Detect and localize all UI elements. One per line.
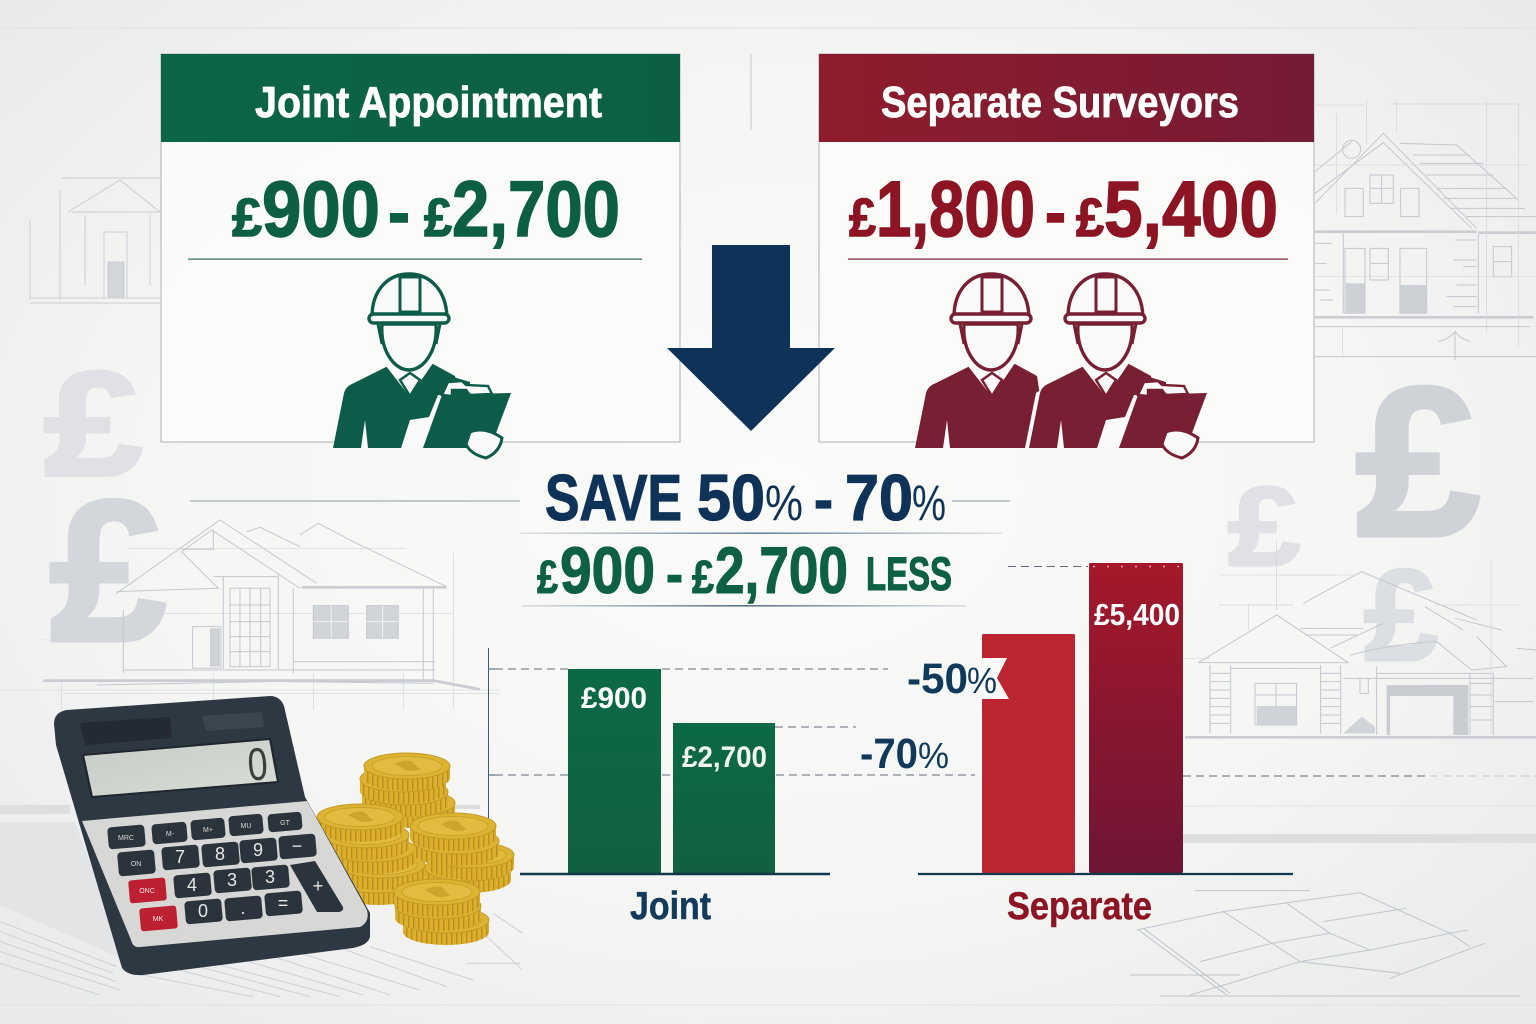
key labels: 0 [198, 901, 208, 921]
calculator lower face [82, 801, 368, 947]
save percentage: % [912, 475, 946, 531]
key labels: ONC [139, 888, 155, 895]
price range: £ [232, 188, 262, 248]
key labels: GT [280, 820, 291, 827]
panel body [819, 54, 1314, 442]
save percentage: - [814, 466, 833, 533]
price range: - [388, 173, 410, 251]
key labels: 7 [175, 847, 185, 867]
red keys [128, 877, 178, 932]
bar label: 900: £900 [581, 682, 647, 715]
display [83, 739, 278, 797]
key labels: MRC [118, 835, 134, 842]
key labels: ON [131, 861, 141, 868]
panel header bar [819, 54, 1314, 142]
axis label: joint: Joint [630, 885, 711, 928]
house sketch: lower right and floor plan [1130, 540, 1536, 996]
key labels [118, 820, 323, 923]
house sketch: top left [30, 178, 162, 303]
function keys [107, 812, 343, 925]
key labels: MK [153, 916, 164, 923]
amount less: £ [537, 551, 558, 603]
pound sign: lower left: £ [50, 460, 166, 683]
icon: two surveyors [915, 274, 1207, 458]
paper lines under calculator [0, 913, 523, 997]
bar top dots [1093, 566, 1180, 568]
right coin stack [410, 813, 514, 893]
bar: joint 900 [568, 669, 661, 873]
chart axis [488, 648, 495, 875]
key labels: . [240, 898, 246, 918]
house sketch: centre left [43, 520, 500, 710]
key labels: 9 [253, 840, 263, 860]
key labels: M+ [203, 827, 213, 834]
key labels: 3 [265, 867, 275, 887]
solar panel [80, 717, 172, 745]
panel: joint appointment [161, 54, 680, 458]
price range: £ [849, 188, 876, 248]
save percentage: % [765, 475, 803, 531]
heading: Separate Surveyors [881, 78, 1239, 127]
price range: 2,700 [452, 164, 620, 253]
bar: separate higher [1089, 563, 1183, 873]
price range [849, 164, 1278, 253]
heading: Joint Appointment [255, 78, 602, 127]
price range: 5,400 [1104, 164, 1278, 253]
key labels: = [278, 893, 288, 913]
baseline: separate [918, 873, 1293, 875]
calculator shadow [0, 822, 125, 960]
amount less: LESS [866, 547, 952, 600]
bar chart [488, 563, 1536, 928]
panel header bar [161, 54, 680, 142]
callout: minus fifty: -50 [907, 655, 968, 703]
savings headline [190, 461, 1010, 607]
bar: joint 2700 [673, 723, 775, 873]
amount less: 900 [560, 533, 655, 607]
amount less: - [666, 542, 683, 605]
arrow: savings down [667, 245, 835, 431]
pound sign: right lower: £ [1364, 542, 1438, 688]
left coin stack [317, 804, 425, 905]
callout: minus seventy: % [918, 735, 949, 776]
price range: £ [424, 188, 452, 248]
save percentage: SAVE [545, 461, 682, 534]
display digit: 0 [246, 737, 269, 791]
save percentage: 70 [845, 461, 913, 534]
save percentage [545, 461, 946, 534]
key labels: MU [241, 823, 251, 830]
price range: 900 [262, 164, 380, 253]
pound sign: top left: £ [44, 342, 142, 507]
save percentage: 50 [697, 461, 765, 534]
callout: minus fifty: % [967, 660, 997, 701]
amount less: 2,700 [715, 533, 848, 607]
rule between lines [520, 532, 1002, 534]
back coin stack [360, 753, 455, 828]
baseline: joint [520, 873, 830, 875]
divider rule [188, 258, 642, 260]
key labels: + [313, 876, 323, 896]
callout: minus fifty [907, 655, 997, 703]
callout: minus seventy [860, 730, 949, 778]
brand plate [202, 712, 264, 731]
amount less: £ [692, 551, 714, 603]
house sketch: top right [1315, 100, 1536, 360]
key labels: 4 [187, 875, 197, 895]
price range: 1,800 [876, 164, 1035, 253]
bar label: 5400: £5,400 [1094, 597, 1180, 632]
price range: £ [1076, 188, 1104, 248]
dashed guide lines [495, 566, 1536, 776]
divider rule [848, 258, 1288, 260]
ribbon behind minus fifty [975, 658, 1009, 699]
icon: calculator [54, 696, 370, 975]
bar: separate lower [982, 634, 1075, 873]
callout: minus seventy: -70 [860, 730, 918, 778]
keypad [107, 812, 343, 932]
rule under amount [522, 605, 966, 607]
panel body [161, 54, 680, 442]
price range: - [1045, 173, 1066, 251]
icon: surveyor with clipboard [333, 274, 511, 458]
key labels: M- [166, 831, 175, 838]
front coin stack [394, 879, 489, 945]
bar label: 2700: £2,700 [682, 741, 767, 774]
pound sign: right small: £ [1228, 464, 1300, 589]
panel: separate surveyors [819, 54, 1314, 458]
calculator body [54, 696, 370, 975]
centre divider [750, 54, 752, 130]
background band [0, 805, 1536, 843]
amount less [537, 533, 952, 607]
rules around headline [190, 500, 1010, 502]
pound sign: right large: £ [1356, 343, 1480, 580]
price range [232, 164, 620, 253]
key labels: 3 [227, 870, 237, 890]
icon: coins [317, 753, 514, 945]
axis label: separate: Separate [1007, 885, 1152, 928]
key labels: 8 [215, 844, 225, 864]
key labels: − [292, 836, 302, 856]
